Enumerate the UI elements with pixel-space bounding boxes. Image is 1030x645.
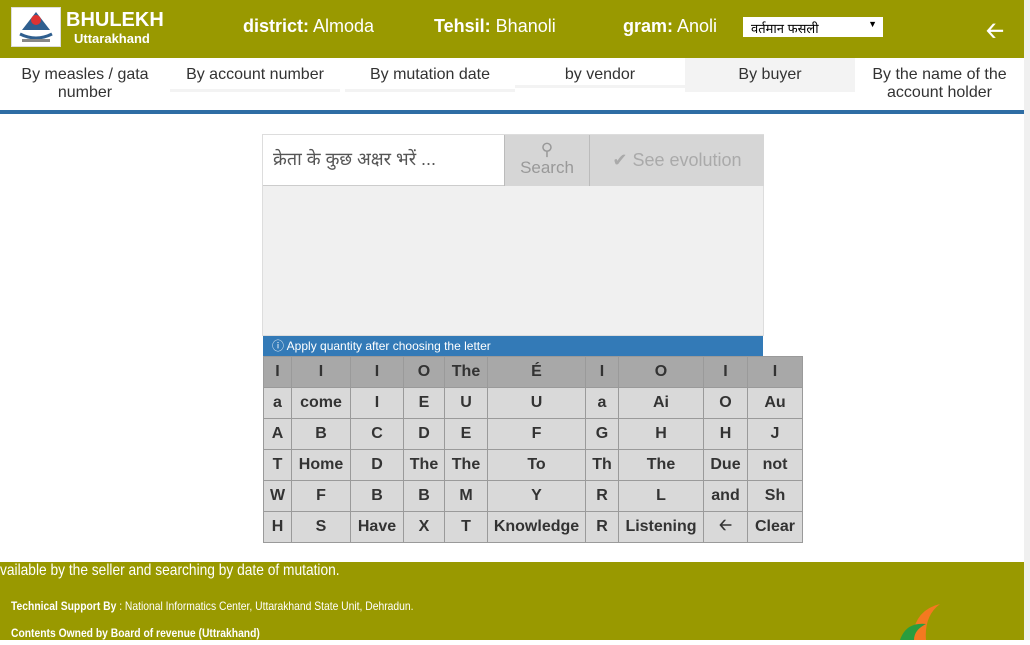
tab: mutation date: By mutation date bbox=[370, 66, 490, 83]
keyboard: Sh bbox=[765, 487, 785, 504]
keyboard: a bbox=[273, 394, 282, 411]
keyboard: B bbox=[418, 487, 430, 504]
keyboard: G bbox=[596, 425, 608, 442]
keyboard: I bbox=[723, 363, 728, 380]
keyboard: I bbox=[375, 394, 379, 411]
keyboard: not bbox=[763, 456, 787, 473]
search input: क्रेता के कुछ अक्षर भरें ... bbox=[273, 149, 436, 169]
gram: gram: Anoli bbox=[623, 16, 717, 36]
district: district: Almoda bbox=[243, 16, 374, 36]
footer bbox=[0, 562, 1024, 640]
icon: back arrow: 🡠 bbox=[986, 18, 1004, 43]
keyboard: Home bbox=[299, 456, 343, 473]
technical support: Technical Support By : National Informatics Center, Uttarakhand State Unit, Dehradun. bbox=[11, 599, 413, 613]
keyboard: S bbox=[316, 518, 326, 535]
logo bbox=[11, 7, 61, 47]
keyboard: I bbox=[375, 363, 379, 380]
keyboard: D bbox=[371, 456, 383, 473]
keyboard: E bbox=[461, 425, 471, 442]
info bar: ⓘ Apply quantity after choosing the letter bbox=[272, 339, 491, 353]
dropdown bbox=[743, 17, 883, 37]
keyboard: R bbox=[596, 487, 608, 504]
keyboard: A bbox=[272, 425, 283, 442]
keyboard: U bbox=[531, 394, 542, 411]
site title bbox=[66, 9, 164, 46]
keyboard: H bbox=[720, 425, 731, 442]
see evolution button: ✔ See evolution bbox=[612, 150, 742, 170]
keyboard: X bbox=[419, 518, 429, 535]
keyboard: I bbox=[773, 363, 777, 380]
tehsil: Tehsil: Bhanoli bbox=[434, 16, 556, 36]
tab: vendor: by vendor bbox=[565, 66, 635, 83]
keyboard: The bbox=[452, 456, 480, 473]
keyboard: 🡠 bbox=[719, 516, 732, 534]
site title: BHULEKH bbox=[66, 9, 164, 31]
keyboard: F bbox=[316, 487, 326, 504]
keyboard: Have bbox=[358, 518, 396, 535]
search input bbox=[263, 135, 504, 186]
keyboard: Listening bbox=[625, 518, 697, 535]
keyboard: F bbox=[532, 425, 541, 442]
tab: mutation date bbox=[345, 58, 515, 92]
keyboard: U bbox=[460, 394, 472, 411]
keyboard: The bbox=[410, 456, 438, 473]
keyboard: C bbox=[371, 425, 383, 442]
keyboard: Au bbox=[764, 394, 786, 411]
keyboard: B bbox=[371, 487, 383, 504]
keyboard: O bbox=[655, 363, 667, 380]
icon: footer logo bbox=[900, 604, 940, 640]
keyboard: O bbox=[719, 394, 732, 411]
keyboard: W bbox=[270, 487, 285, 504]
keyboard: D bbox=[418, 425, 430, 442]
tab: measles: By measles / gata number bbox=[21, 66, 149, 101]
keyboard: I bbox=[275, 363, 280, 380]
tab: account holder: By the name of the account holder bbox=[872, 66, 1007, 101]
keyboard: J bbox=[771, 425, 779, 442]
keyboard: Knowledge bbox=[494, 518, 579, 535]
dropdown: वर्तमान फसली bbox=[751, 21, 819, 36]
keyboard: E bbox=[419, 394, 429, 411]
keyboard: come bbox=[300, 394, 342, 411]
keyboard: I bbox=[319, 363, 323, 380]
keyboard: Due bbox=[710, 456, 741, 473]
keyboard: L bbox=[656, 487, 666, 504]
keyboard: Clear bbox=[755, 518, 795, 535]
keyboard: Ai bbox=[653, 394, 669, 411]
keyboard: The bbox=[452, 363, 480, 380]
keyboard: Y bbox=[531, 487, 542, 504]
keyboard: H bbox=[655, 425, 667, 442]
keyboard: T bbox=[461, 518, 471, 535]
keyboard: I bbox=[600, 363, 604, 380]
keyboard bbox=[263, 356, 803, 543]
tab: account number: By account number bbox=[186, 66, 324, 83]
keyboard: O bbox=[418, 363, 430, 380]
keyboard: a bbox=[598, 394, 606, 411]
see evolution button bbox=[589, 135, 764, 186]
marquee text: vailable by the seller and searching by date of mutation. bbox=[0, 562, 340, 579]
info bar bbox=[263, 336, 763, 356]
contents owned: Contents Owned by Board of revenue (Uttrakhand) bbox=[11, 626, 260, 640]
dropdown: ▼ bbox=[868, 19, 877, 29]
site title: Uttarakhand bbox=[74, 31, 150, 46]
tab: account number bbox=[170, 58, 340, 92]
keyboard: B bbox=[315, 425, 327, 442]
tab: buyer bbox=[685, 58, 855, 92]
tab: vendor bbox=[515, 58, 685, 88]
header bar bbox=[0, 0, 1024, 58]
keyboard: T bbox=[273, 456, 282, 473]
nav tabs bbox=[21, 58, 1007, 101]
search button: Search bbox=[520, 158, 574, 177]
keyboard: É bbox=[531, 363, 542, 380]
keyboard: The bbox=[647, 456, 675, 473]
keyboard: R bbox=[596, 518, 608, 535]
keyboard: M bbox=[459, 487, 473, 504]
keyboard: H bbox=[272, 518, 283, 535]
search panel bbox=[262, 134, 764, 336]
search button: ⚲ bbox=[541, 140, 553, 159]
keyboard: and bbox=[711, 487, 740, 504]
search button bbox=[504, 135, 589, 186]
keyboard: Th bbox=[592, 456, 612, 473]
tab: buyer: By buyer bbox=[738, 66, 802, 83]
keyboard: To bbox=[527, 456, 546, 473]
